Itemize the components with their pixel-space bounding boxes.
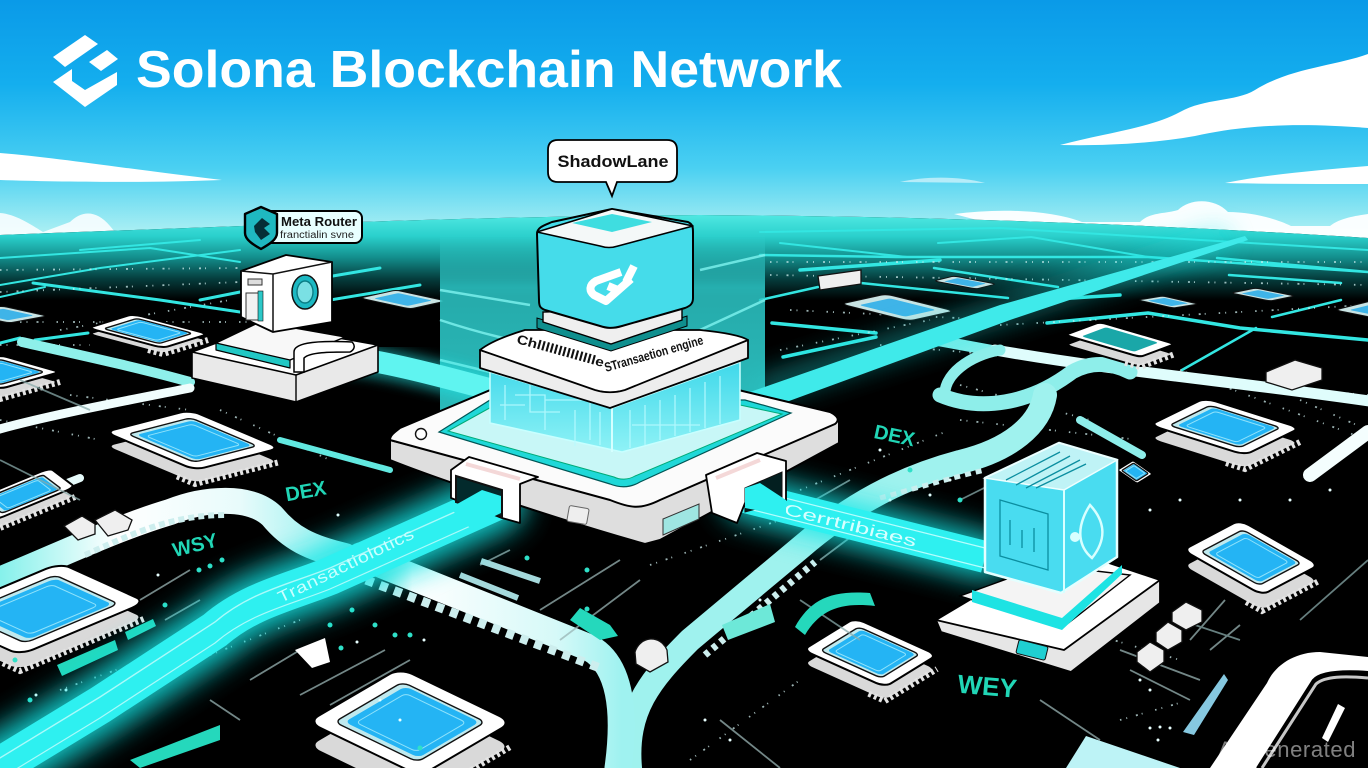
- platform text: STransaetion engine: [603, 332, 705, 375]
- logo: [53, 35, 118, 107]
- title: Solona Blockchain Network: [136, 41, 842, 99]
- clouds: [0, 54, 1368, 240]
- chip: north west: [88, 314, 208, 354]
- beam: meta router link: [300, 356, 500, 392]
- beam label: Cerrtribiaes: [782, 501, 918, 551]
- platform text: [515, 331, 705, 375]
- meta router base: [192, 325, 378, 402]
- white specks: [36, 450, 1330, 740]
- dim circuit traces: [0, 380, 1368, 768]
- callout: shadowlane: [548, 140, 677, 196]
- small far chips: [0, 276, 1368, 323]
- meta router cube: [241, 255, 332, 332]
- road: south centre branch: [629, 395, 1045, 768]
- teal ring: [439, 400, 791, 487]
- glyph: WSY west: WSY: [170, 529, 221, 562]
- bar at bottom right: [1183, 674, 1228, 735]
- road tooth marks: [85, 470, 985, 668]
- glyph: DEX north west: DEX: [284, 477, 329, 506]
- glow: transaction beams: [0, 240, 1220, 768]
- small dice blocks: [64, 270, 1322, 672]
- pale cyan block bottom right: [1066, 736, 1180, 768]
- left port: [451, 457, 538, 523]
- small chip peeking behind cube: [1117, 460, 1153, 484]
- glyph: WEY south: WEY: [957, 669, 1018, 704]
- speck texture: [0, 262, 1368, 760]
- top platform: [480, 340, 748, 408]
- beam: contributes: [745, 488, 985, 568]
- pale network roads: [0, 340, 1368, 768]
- road: upper left: [0, 342, 390, 510]
- callout: shadowlane: ShadowLane: [558, 152, 668, 171]
- node: central engine base: [390, 330, 839, 544]
- sky background: [0, 0, 1368, 240]
- beam label: Transactiolotics: [275, 526, 418, 607]
- chip: south east small: [803, 618, 937, 701]
- road: east branches: [935, 340, 1368, 475]
- road: long south diagonal: [360, 556, 621, 768]
- beam: north east link: [750, 236, 1248, 408]
- distant network lines: [0, 228, 1368, 370]
- chip: left mid: [105, 410, 280, 484]
- chip: east upper: [1150, 398, 1300, 469]
- chip: large south west: [0, 563, 146, 671]
- label: meta router: franctialin svne: [280, 230, 354, 241]
- chip: far east with label: [1065, 322, 1175, 367]
- glass engine block: [490, 362, 740, 452]
- road: south west white curve: [0, 501, 345, 582]
- chip: west edge mid: [0, 468, 75, 530]
- pale bars near centre: [460, 561, 540, 598]
- haze inner traces: [440, 255, 765, 372]
- teal chevron bars: [57, 592, 875, 768]
- meta router lens: [292, 275, 318, 309]
- icon: shield: [245, 207, 277, 249]
- engine circuitry: [500, 376, 720, 448]
- haze behind central tower: [440, 230, 765, 420]
- road: south east white curve: [1210, 652, 1368, 768]
- node: meta router: [192, 255, 378, 402]
- glyph: DEX right: DEX: [872, 421, 917, 451]
- chip: south: [308, 668, 512, 768]
- ground plane: [0, 215, 1368, 768]
- chip: east: [1183, 520, 1319, 611]
- cube body: [985, 443, 1117, 593]
- floor glyphs: [170, 421, 1018, 704]
- node: right contributor cube: [936, 443, 1160, 672]
- far horizon teal haze: [0, 215, 1368, 300]
- cube logo: [590, 266, 634, 301]
- beam: transaction analytics: [0, 494, 495, 768]
- watermark: AI Generated: [1218, 737, 1356, 762]
- meta router plate: [216, 322, 345, 368]
- label: meta router: [245, 207, 362, 249]
- meta router link port: [294, 341, 354, 372]
- right port: [706, 453, 786, 523]
- chip: west edge upper: [0, 355, 60, 399]
- label: meta router: Meta Router: [281, 214, 357, 229]
- teal specks: [15, 470, 1020, 748]
- platform text: Chlllllllllllllle: [515, 331, 606, 370]
- node: central cube: [537, 209, 693, 351]
